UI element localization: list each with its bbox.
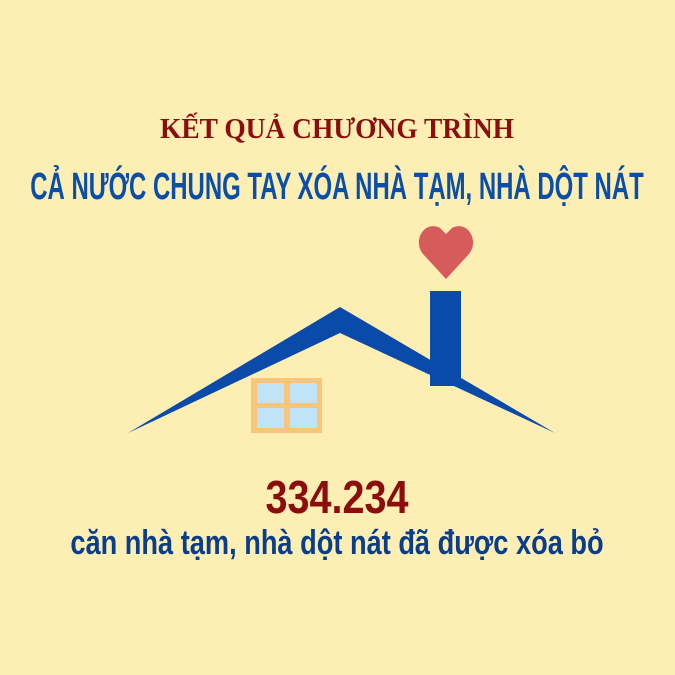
title line 1: KẾT QUẢ CHƯƠNG TRÌNH [160,114,514,145]
statistic caption: căn nhà tạm, nhà dột nát đã được xóa bỏ [70,524,604,562]
icon: roof [128,307,555,433]
icon: window [251,378,322,433]
icon: heart [419,226,473,279]
title line 2: CẢ NƯỚC CHUNG TAY XÓA NHÀ TẠM, NHÀ DỘT NÁT [30,166,644,208]
statistic number: 334.234 [265,471,409,523]
icon: chimney [430,291,461,386]
